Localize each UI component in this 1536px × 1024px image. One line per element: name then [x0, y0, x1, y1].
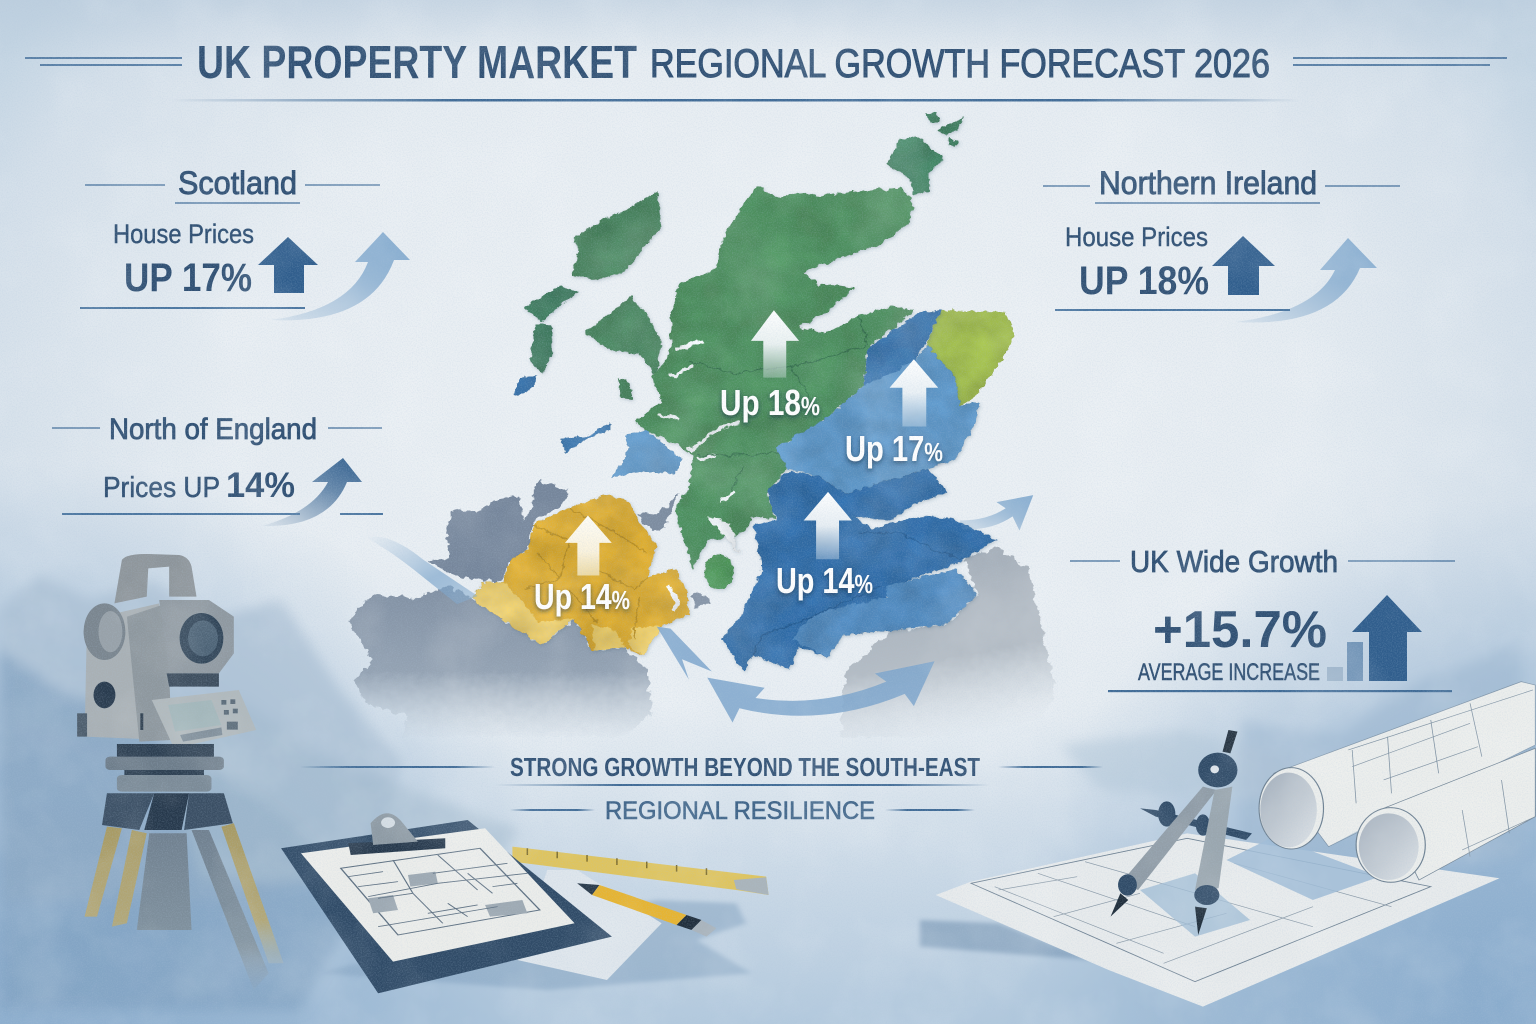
- panel: Northern Ireland: [1043, 165, 1400, 323]
- arrow: Highlands up: [751, 310, 799, 378]
- title: REGIONAL GROWTH FORECAST 2026: [650, 42, 1270, 86]
- illustration: clipboard, plan, tape and pencil: [281, 813, 769, 993]
- heading: Northern Ireland: Northern Ireland: [1099, 165, 1317, 201]
- map: Northern Ireland region gold: [471, 494, 689, 655]
- flow arrow: south of Northern Ireland: [657, 627, 712, 680]
- loose sheet: [517, 870, 662, 980]
- rolled plans: [1259, 682, 1535, 882]
- icon: block up arrow: [1212, 236, 1275, 295]
- plan sheet: [301, 828, 575, 962]
- figure: prices up 14 percent: Prices UP: [103, 472, 220, 504]
- label: Central: Up 17%: [845, 428, 943, 469]
- icon: curved arrow: [1235, 238, 1377, 323]
- text: strong growth beyond the south-east: STRONG GROWTH BEYOND THE SOUTH-EAST: [510, 752, 980, 782]
- panel: North of England: 14%: [226, 466, 295, 505]
- text: average increase: AVERAGE INCREASE: [1138, 659, 1320, 686]
- label: Northern Ireland: Up 14%: [534, 576, 630, 617]
- figure: plus 15.7 percent: +15.7%: [1153, 601, 1327, 659]
- heading: North of England: North of England: [109, 413, 317, 446]
- heading: Scotland: Scotland: [178, 165, 297, 201]
- label: Southern: Up 14%: [776, 560, 873, 601]
- text: house prices: House Prices: [113, 219, 254, 249]
- map labels: [534, 382, 943, 617]
- clip: [348, 813, 445, 855]
- text: house prices: House Prices: [1065, 222, 1208, 252]
- arrow: Southern up: [804, 492, 852, 559]
- tripod legs: [85, 823, 284, 990]
- map: England greyed out: [840, 547, 1056, 737]
- icon: rising bars: [1327, 642, 1363, 681]
- map: Scotland islands green: [524, 112, 964, 589]
- shadow wash: [318, 900, 751, 990]
- illustration: compass on blueprint with rolled plans: [920, 682, 1535, 1007]
- icon: curved arrow: [262, 458, 362, 526]
- flow arrow: east: [960, 495, 1033, 531]
- map of Scotland, Northern Ireland and neighbours: [349, 112, 1056, 737]
- title: [25, 36, 1507, 102]
- label: Highlands: Up 18%: [720, 382, 820, 423]
- tape measure: [512, 847, 769, 895]
- map: Central region blue: [776, 310, 978, 494]
- figure: up 17 percent: UP 17%: [124, 256, 252, 300]
- flow arrow: double curved: [707, 661, 935, 723]
- clipboard board: [281, 820, 612, 993]
- map: Ireland greyed out: [349, 480, 712, 737]
- shadow wash: [920, 920, 1093, 960]
- panel: North of England: [52, 413, 383, 526]
- background: misty mountains left: [0, 575, 520, 1010]
- panel: UK Wide Growth: [1070, 544, 1455, 692]
- illustration: surveying total station on tripod: [77, 554, 284, 990]
- map: Hebrides blue islands: [512, 376, 682, 478]
- arrow: Central up: [890, 359, 938, 427]
- flow arrow: north-west band: [365, 536, 478, 604]
- map: Southern region deep blue: [721, 469, 997, 671]
- panel: Scotland: [80, 165, 410, 320]
- arrow: Northern Ireland up: [565, 516, 612, 576]
- map: Highlands region green: [634, 186, 914, 569]
- map: Aberdeenshire region lime: [925, 310, 1015, 406]
- blueprint sheet: [936, 833, 1500, 1007]
- text: regional resilience: REGIONAL RESILIENCE: [605, 797, 875, 825]
- background: misty mountains right: [1060, 640, 1520, 860]
- icon: block up arrow: [258, 237, 318, 293]
- compass: [1111, 730, 1252, 937]
- pencil: [577, 883, 716, 937]
- heading: UK Wide Growth: UK Wide Growth: [1130, 544, 1338, 579]
- figure: up 18 percent: UP 18%: [1079, 259, 1209, 303]
- title: UK PROPERTY MARKET: [197, 36, 637, 88]
- instrument base: [102, 744, 233, 830]
- icon: block up arrow: [1352, 595, 1422, 681]
- icon: curved arrow: [270, 232, 410, 320]
- instrument head: [77, 554, 256, 748]
